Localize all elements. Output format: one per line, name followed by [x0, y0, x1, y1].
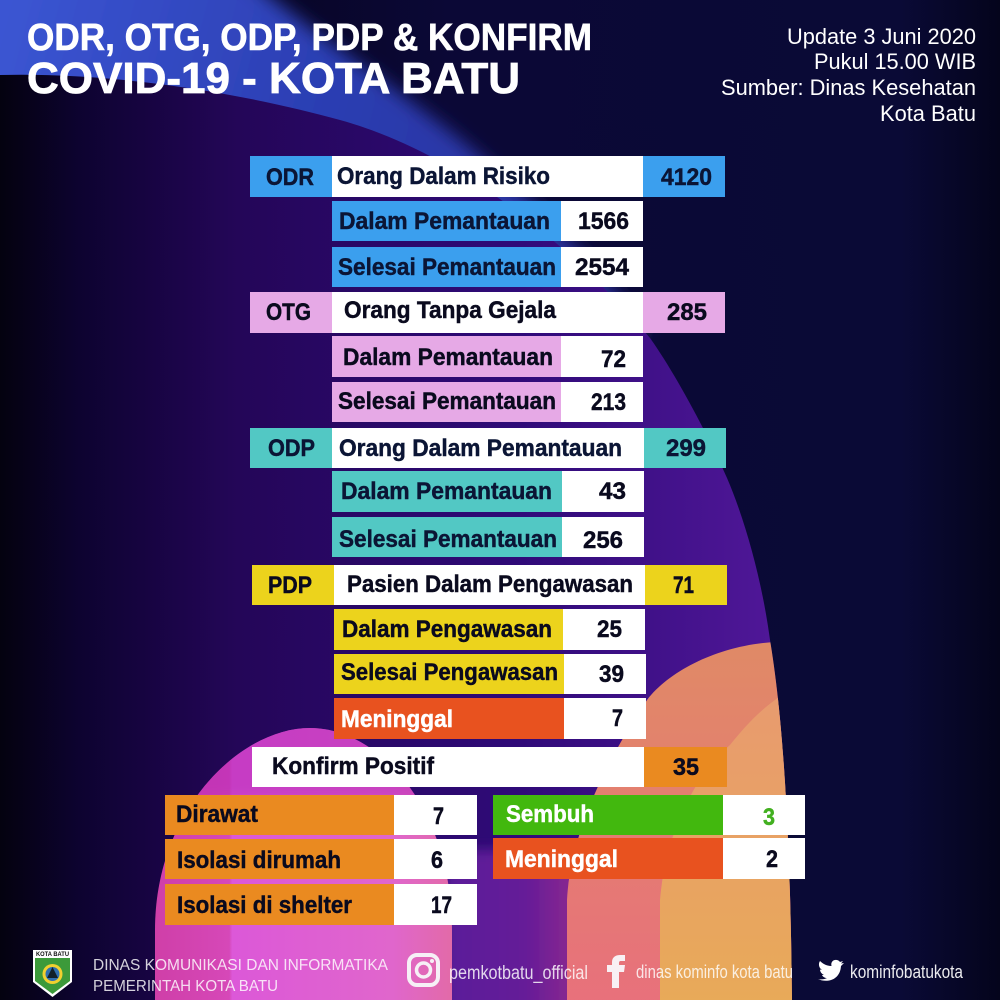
dirawat: 7 [433, 803, 444, 830]
meninggal [493, 838, 805, 879]
ODR selesai pemantauan [332, 247, 643, 287]
konfirm positif row: Konfirm Positif [272, 753, 435, 780]
OTG selesai pemantauan [332, 382, 643, 422]
ODP header row: 299 [666, 435, 706, 462]
PDP dalam pengawasan: 25 [597, 616, 622, 643]
ODP dalam pemantauan: Dalam Pemantauan [341, 478, 552, 505]
isolasi dirumah: 6 [431, 847, 443, 874]
PDP selesai pengawasan [334, 654, 646, 694]
instagram handle: pemkotbatu_official [449, 963, 588, 984]
OTG dalam pemantauan: 72 [601, 346, 626, 373]
dirawat: Dirawat [176, 801, 258, 828]
OTG selesai pemantauan: Selesai Pemantauan [338, 388, 556, 415]
title: ODR, OTG, ODP, PDP & KONFIRM [27, 17, 592, 59]
PDP dalam pengawasan: Dalam Pengawasan [342, 616, 552, 643]
sembuh: 3 [763, 804, 775, 831]
ODP header row [250, 428, 726, 468]
ODR dalam pemantauan: Dalam Pemantauan [339, 208, 550, 235]
ODR dalam pemantauan: 1566 [578, 208, 629, 235]
update info: Update 3 Juni 2020 [787, 24, 976, 49]
ODR header row: Orang Dalam Risiko [337, 163, 550, 190]
PDP header row: Pasien Dalam Pengawasan [347, 571, 633, 598]
ODR dalam pemantauan [332, 201, 643, 241]
ODP dalam pemantauan: 43 [599, 478, 626, 505]
isolasi di shelter [165, 884, 477, 925]
ODP selesai pemantauan: 256 [583, 527, 623, 554]
logo: Kota Batu shield [33, 950, 72, 997]
OTG header row: 285 [667, 299, 707, 326]
OTG header row [250, 292, 725, 333]
ODP selesai pemantauan: Selesai Pemantauan [339, 526, 557, 553]
PDP selesai pengawasan: 39 [599, 661, 624, 688]
PDP header row [252, 565, 727, 605]
dirawat [165, 795, 477, 835]
update info: Kota Batu [880, 101, 976, 126]
PDP header row: 71 [673, 572, 694, 599]
OTG header row: OTG [266, 299, 311, 326]
update info: Pukul 15.00 WIB [814, 49, 976, 74]
PDP meninggal: 7 [612, 705, 623, 732]
ODR header row [250, 156, 725, 197]
twitter handle: kominfobatukota [850, 962, 964, 982]
ODP header row: Orang Dalam Pemantauan [339, 435, 622, 462]
isolasi dirumah: Isolasi dirumah [177, 847, 341, 874]
sembuh: Sembuh [506, 801, 594, 828]
PDP meninggal [334, 698, 646, 739]
ODP header row: ODP [268, 435, 315, 462]
ODP dalam pemantauan [332, 471, 644, 512]
PDP dalam pengawasan [334, 609, 645, 650]
title [27, 17, 592, 103]
update info: Sumber: Dinas Kesehatan [721, 75, 976, 100]
isolasi dirumah [165, 839, 477, 879]
sembuh [493, 795, 805, 835]
ODR header row: ODR [266, 164, 314, 191]
facebook handle: dinas kominfo kota batu [636, 962, 793, 982]
ODR header row: 4120 [661, 164, 712, 191]
OTG selesai pemantauan: 213 [591, 389, 626, 416]
ODP selesai pemantauan [332, 517, 644, 557]
PDP meninggal: Meninggal [341, 706, 453, 733]
agency name: DINAS KOMUNIKASI DAN INFORMATIKA [93, 957, 388, 974]
OTG header row: Orang Tanpa Gejala [344, 297, 557, 324]
icon: twitter [818, 960, 844, 981]
icon: instagram [409, 955, 438, 985]
agency name [93, 957, 388, 995]
ODR selesai pemantauan: Selesai Pemantauan [338, 254, 556, 281]
OTG dalam pemantauan: Dalam Pemantauan [343, 344, 553, 371]
meninggal: 2 [766, 846, 778, 873]
PDP selesai pengawasan: Selesai Pengawasan [341, 659, 558, 686]
isolasi di shelter: 17 [431, 892, 452, 919]
update info [721, 24, 976, 126]
konfirm positif row [252, 747, 727, 787]
PDP header row: PDP [268, 572, 312, 599]
logo: Kota Batu shield: KOTA BATU [36, 952, 69, 958]
agency name: PEMERINTAH KOTA BATU [93, 978, 278, 995]
konfirm positif row: 35 [673, 754, 699, 781]
title: COVID-19 - KOTA BATU [27, 54, 520, 103]
ODR selesai pemantauan: 2554 [575, 254, 630, 281]
OTG dalam pemantauan [332, 336, 643, 377]
meninggal: Meninggal [505, 846, 618, 873]
icon: facebook [607, 955, 625, 988]
isolasi di shelter: Isolasi di shelter [177, 892, 352, 919]
